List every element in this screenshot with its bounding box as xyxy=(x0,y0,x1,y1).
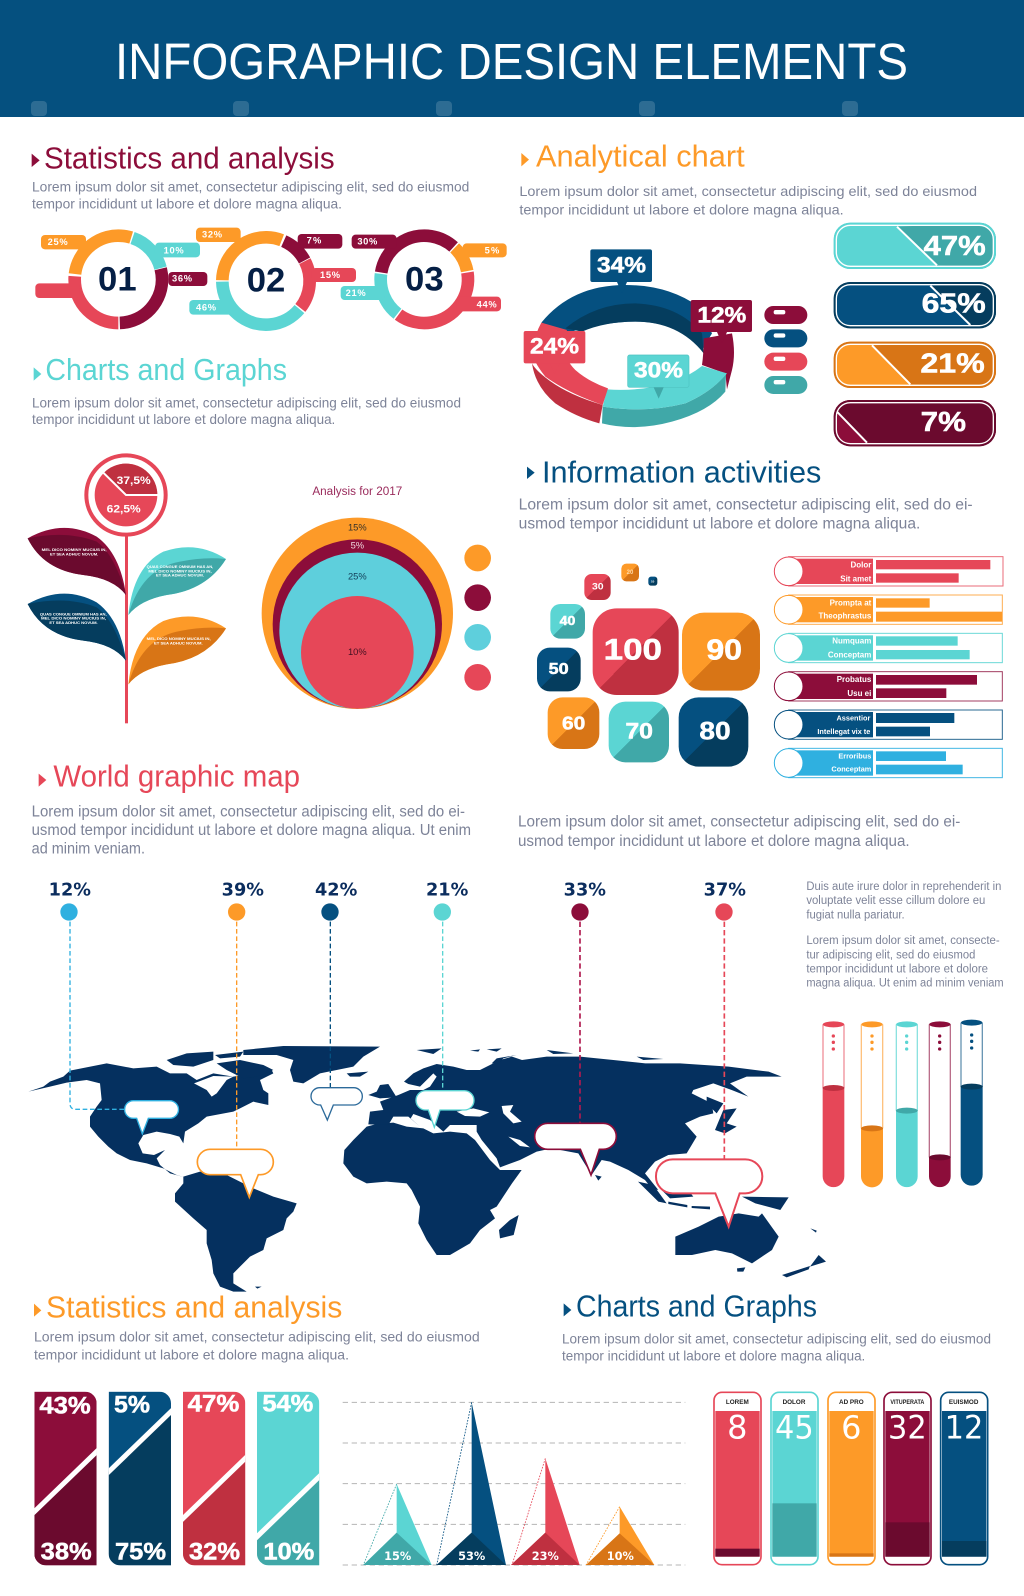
split bars xyxy=(32,1391,322,1565)
panel: information activities xyxy=(518,457,1003,850)
bar 47% / 32%: 32% xyxy=(189,1538,240,1565)
bar row: Dolor / Sit amet xyxy=(774,557,1003,586)
bar row: Dolor / Sit amet: Sit amet xyxy=(840,575,872,584)
leaf: maroon xyxy=(28,528,126,595)
leaf: orange: MEL DICO NOMINY MUCIUS IN, xyxy=(147,637,211,641)
bar 5% / 75% xyxy=(106,1391,174,1565)
bar 5% / 75%: 5% xyxy=(114,1391,150,1418)
column: EUISMOD 12: 12 xyxy=(945,1408,983,1446)
bar row: Numquam / Conceptam: Conceptam xyxy=(828,650,871,659)
ring chart 02: 15% xyxy=(320,270,341,280)
ring chart 03: 5% xyxy=(485,245,500,255)
tube: red xyxy=(823,1021,844,1187)
bar row: Probatus / Usu ei: Usu ei xyxy=(847,689,871,698)
bar 54% / 10%: 10% xyxy=(263,1538,314,1565)
panel: charts and graphs columns xyxy=(562,1291,991,1565)
spike 23%: 23% xyxy=(532,1549,559,1563)
text block: Lorem ipsum dolor sit amet, consecte- xyxy=(806,933,1000,947)
column: AD PRO 6: 6 xyxy=(841,1408,862,1446)
text block: Lorem ipsum dolor sit amet, consectetur adipiscing elit, sed do eiusmod xyxy=(32,394,461,410)
leaf: navy: ET SEA ADHUC NOVUM. xyxy=(49,621,98,625)
percentage pill: 21% xyxy=(834,342,996,388)
text block xyxy=(34,1329,480,1362)
number tiles: 40 xyxy=(560,614,575,628)
ring chart 03: 21% xyxy=(346,288,366,298)
leaf: teal xyxy=(128,547,226,615)
ring chart 03: 03 xyxy=(405,261,444,299)
nested circle chart: 25% xyxy=(348,571,367,581)
bar 54% / 10%: 54% xyxy=(262,1391,313,1418)
percentage pill: 7% xyxy=(834,400,996,446)
tube: maroon xyxy=(929,1021,951,1187)
ring chart 02: 46% xyxy=(196,302,217,312)
percentage pill: 65%: 65% xyxy=(922,287,986,318)
heading: Analytical chart xyxy=(536,141,745,174)
text block xyxy=(32,394,461,427)
column: LOREM 8: 8 xyxy=(727,1408,748,1446)
spike 53% xyxy=(437,1402,506,1565)
text block: fugiat nulla pariatur. xyxy=(806,907,905,921)
panel: analytical chart xyxy=(519,141,996,446)
number tiles: 100 xyxy=(604,633,662,666)
bar 47% / 32% xyxy=(180,1391,248,1565)
panel: plant diagram and circle chart xyxy=(28,455,491,723)
text block: tempor incididunt ut labore et dolore magna aliqua. xyxy=(32,196,342,212)
nested circle chart: 5% xyxy=(351,541,364,551)
legend pills xyxy=(764,306,807,394)
text block xyxy=(518,814,960,850)
bar row: Numquam / Conceptam: Numquam xyxy=(832,637,871,646)
column: VITUPERATA 32: 32 xyxy=(888,1408,927,1446)
leaf: navy: MEL DICO NOMINY MUCIUS IN, xyxy=(41,617,106,621)
bar row: Probatus / Usu ei xyxy=(774,672,1002,701)
text block xyxy=(32,178,469,212)
number tiles: 90 xyxy=(706,634,742,666)
text block: Lorem ipsum dolor sit amet, consectetur adipiscing elit, sed do eiusmod xyxy=(562,1330,991,1346)
heading: Statistics and analysis xyxy=(46,1291,342,1324)
tube: orange xyxy=(861,1021,883,1187)
leaf: maroon: MEL DICO NOMINY MUCIUS IN, xyxy=(42,548,107,552)
column: LOREM 8: LOREM xyxy=(726,1399,749,1406)
column: VITUPERATA 32: VITUPERATA xyxy=(890,1399,925,1406)
bar 47% / 32%: 47% xyxy=(188,1391,239,1418)
leaf: teal: QUAS CONGUE OMNIUM HAS AN, xyxy=(147,565,213,569)
map marker: 37%: 37% xyxy=(704,881,746,901)
map marker: 39% xyxy=(197,881,273,1197)
plant infographic: 37,5% xyxy=(117,475,151,487)
leaf: maroon: ET SEA ADHUC NOVUM. xyxy=(50,552,98,556)
bar row: Numquam / Conceptam xyxy=(774,633,1002,663)
ring chart 02 xyxy=(189,219,356,343)
map marker: 39%: 39% xyxy=(222,881,264,901)
heading: World graphic map xyxy=(53,761,300,794)
spike 53%: 53% xyxy=(458,1549,485,1563)
text block: tempor incididunt ut labore et dolore magna aliqua. xyxy=(519,201,844,217)
bar 5% / 75%: 75% xyxy=(115,1538,166,1565)
percentage pill: 7%: 7% xyxy=(921,406,966,437)
text block xyxy=(32,804,471,857)
number tiles: 80 xyxy=(699,717,731,745)
text block: usmod tempor incididunt ut labore et dolore magna aliqua. xyxy=(519,516,920,533)
map marker: 12%: 12% xyxy=(49,881,91,901)
column: LOREM 8 xyxy=(714,1392,761,1565)
plant infographic xyxy=(28,455,226,723)
bar 54% / 10% xyxy=(254,1391,322,1565)
column: EUISMOD 12 xyxy=(941,1392,988,1565)
text block: Lorem ipsum dolor sit amet, consectetur adipiscing elit, sed do ei- xyxy=(32,804,465,821)
bar 43% / 38%: 43% xyxy=(39,1392,91,1419)
text block: Lorem ipsum dolor sit amet, consectetur adipiscing elit, sed do ei- xyxy=(518,814,960,831)
leaf: teal: ET SEA ADHUC NOVUM. xyxy=(156,574,204,578)
column: DOLOR 45 xyxy=(771,1392,818,1565)
text block xyxy=(519,496,973,533)
ring chart 03: 30% xyxy=(357,237,378,247)
text block xyxy=(806,879,1004,990)
map marker: 42% xyxy=(311,881,362,1120)
3D donut chart xyxy=(524,249,752,427)
text block: magna aliqua. Ut enim ad minim veniam xyxy=(806,976,1004,990)
spike 10%: 10% xyxy=(607,1549,634,1563)
spike 15%: 15% xyxy=(384,1549,411,1563)
number tiles xyxy=(537,564,760,767)
percentage pill: 47%: 47% xyxy=(924,230,986,261)
ring chart 01: 25% xyxy=(48,237,68,247)
world map silhouette xyxy=(28,1046,826,1292)
map marker: 21%: 21% xyxy=(426,881,468,901)
text block xyxy=(519,183,977,217)
number tiles: 30 xyxy=(592,581,604,591)
ring chart 01: 10% xyxy=(164,245,184,255)
ring chart 02: 02 xyxy=(247,262,285,300)
bar row: Prompta at / Theophrastus: Prompta at xyxy=(830,598,872,607)
map marker: 33% xyxy=(535,881,616,1175)
bar row: Erroribus / Conceptam: Conceptam xyxy=(831,765,872,774)
circle chart legend xyxy=(464,545,491,691)
spike 10% xyxy=(586,1507,654,1565)
map marker: 33%: 33% xyxy=(564,881,606,901)
map marker: 42%: 42% xyxy=(315,881,357,901)
map marker: 21% xyxy=(416,881,474,1127)
bar row: Erroribus / Conceptam xyxy=(774,748,1002,778)
column: DOLOR 45: 45 xyxy=(775,1408,814,1446)
plant infographic: 62,5% xyxy=(107,504,141,516)
column: EUISMOD 12: EUISMOD xyxy=(949,1399,979,1406)
percentage pill: 65% xyxy=(834,282,996,328)
spike 23% xyxy=(511,1458,580,1565)
map marker: 37% xyxy=(656,881,762,1227)
text block: tempor incididunt ut labore et dolore magna aliqua. xyxy=(32,411,335,427)
triangle chart xyxy=(343,1402,685,1565)
number tiles: 10 xyxy=(651,579,655,583)
bar row: Prompta at / Theophrastus: Theophrastus xyxy=(819,612,872,621)
ring chart 03 xyxy=(341,218,507,341)
ring chart 02: 7% xyxy=(307,235,322,245)
panel: bottom sections xyxy=(32,1291,685,1565)
text block: usmod tempor incididunt ut labore et dolore magna aliqua. Ut enim xyxy=(32,822,471,839)
chart title: Analysis for 2017 xyxy=(312,484,403,498)
column: DOLOR 45: DOLOR xyxy=(783,1399,806,1406)
bar 43% / 38% xyxy=(32,1392,99,1565)
text block: tempor incididunt ut labore et dolore magna aliqua. xyxy=(34,1346,349,1362)
bar row: Prompta at / Theophrastus xyxy=(774,595,1002,624)
column: VITUPERATA 32 xyxy=(884,1392,931,1565)
header banner xyxy=(0,0,1024,117)
3D donut chart: 34% xyxy=(597,253,646,278)
ring chart 01: 36% xyxy=(172,273,193,283)
nested circle chart xyxy=(262,518,453,709)
text block: Lorem ipsum dolor sit amet, consectetur adipiscing elit, sed do eiusmod xyxy=(519,183,977,199)
heading: Information activities xyxy=(542,457,821,490)
percentage pill: 21%: 21% xyxy=(920,347,985,378)
3D donut chart: 12% xyxy=(697,303,746,328)
leaf: orange: ET SEA ADHUC NOVUM. xyxy=(154,641,203,645)
number tiles: 60 xyxy=(562,712,585,733)
percentage pill: 47% xyxy=(834,223,996,269)
bar row: Dolor / Sit amet: Dolor xyxy=(850,560,871,569)
tube: navy xyxy=(961,1020,983,1186)
ring chart 01: 01 xyxy=(98,261,137,299)
number tiles: 20 xyxy=(627,570,634,576)
ring chart 01 xyxy=(35,224,207,335)
spike 15% xyxy=(363,1484,432,1565)
heading: Charts and Graphs xyxy=(576,1291,817,1324)
text block: tur adipiscing elit, sed do eiusmod xyxy=(806,947,975,961)
text block: ad minim veniam. xyxy=(32,840,145,857)
text block: Duis aute irure dolor in reprehenderit in xyxy=(806,879,1001,893)
bar row: Erroribus / Conceptam: Erroribus xyxy=(838,751,871,760)
text block: Lorem ipsum dolor sit amet, consectetur adipiscing elit, sed do ei- xyxy=(519,496,973,513)
text block: Lorem ipsum dolor sit amet, consectetur adipiscing elit, sed do eiusmod xyxy=(34,1329,480,1345)
nested circle chart: 15% xyxy=(348,523,367,533)
number tiles: 70 xyxy=(625,718,653,743)
ring chart 02: 32% xyxy=(202,230,223,240)
text block: tempor incididunt ut labore et dolore xyxy=(806,961,988,975)
text block: Lorem ipsum dolor sit amet, consectetur adipiscing elit, sed do eiusmod xyxy=(32,178,469,194)
bar row: Assentior / Intellegat vix te: Assentior xyxy=(837,713,870,722)
leaf: orange xyxy=(128,617,226,684)
leaf: navy: QUAS CONGUE OMNIUM HAS AN, xyxy=(40,612,107,616)
bar row: Assentior / Intellegat vix te xyxy=(774,710,1002,739)
number tiles: 50 xyxy=(549,661,569,678)
tube: teal xyxy=(896,1021,918,1187)
text block xyxy=(562,1330,991,1364)
ring chart 03: 44% xyxy=(477,299,497,309)
panel: statistics and analysis rings xyxy=(32,142,507,427)
column: AD PRO 6 xyxy=(828,1392,875,1565)
bar 43% / 38%: 38% xyxy=(41,1538,92,1565)
nested circle chart: 10% xyxy=(348,647,367,657)
map marker: 12% xyxy=(49,881,178,1134)
3D donut chart: 24% xyxy=(530,334,579,359)
leaf: navy xyxy=(28,594,126,661)
leaf: teal: MEL DICO NOMINY MUCIUS IN, xyxy=(148,569,212,573)
heading: Charts and Graphs xyxy=(45,354,287,387)
text block: usmod tempor incididunt ut labore et dolore magna aliqua. xyxy=(518,833,910,850)
panel: world map xyxy=(28,881,826,1292)
text block: tempor incididunt ut labore et dolore magna aliqua. xyxy=(562,1348,865,1364)
panel: side notes and test tubes xyxy=(806,879,1004,1187)
column: AD PRO 6: AD PRO xyxy=(839,1399,864,1406)
bar row: Assentior / Intellegat vix te: Intellegat vix te xyxy=(817,727,870,736)
heading: Statistics and analysis xyxy=(44,142,335,175)
title: INFOGRAPHIC DESIGN ELEMENTS xyxy=(115,33,908,90)
panel: world graphic map heading xyxy=(32,761,471,857)
bar row: Probatus / Usu ei: Probatus xyxy=(837,675,872,684)
3D donut chart: 30% xyxy=(634,358,683,383)
text block: voluptate velit esse cillum dolore eu xyxy=(806,893,985,907)
